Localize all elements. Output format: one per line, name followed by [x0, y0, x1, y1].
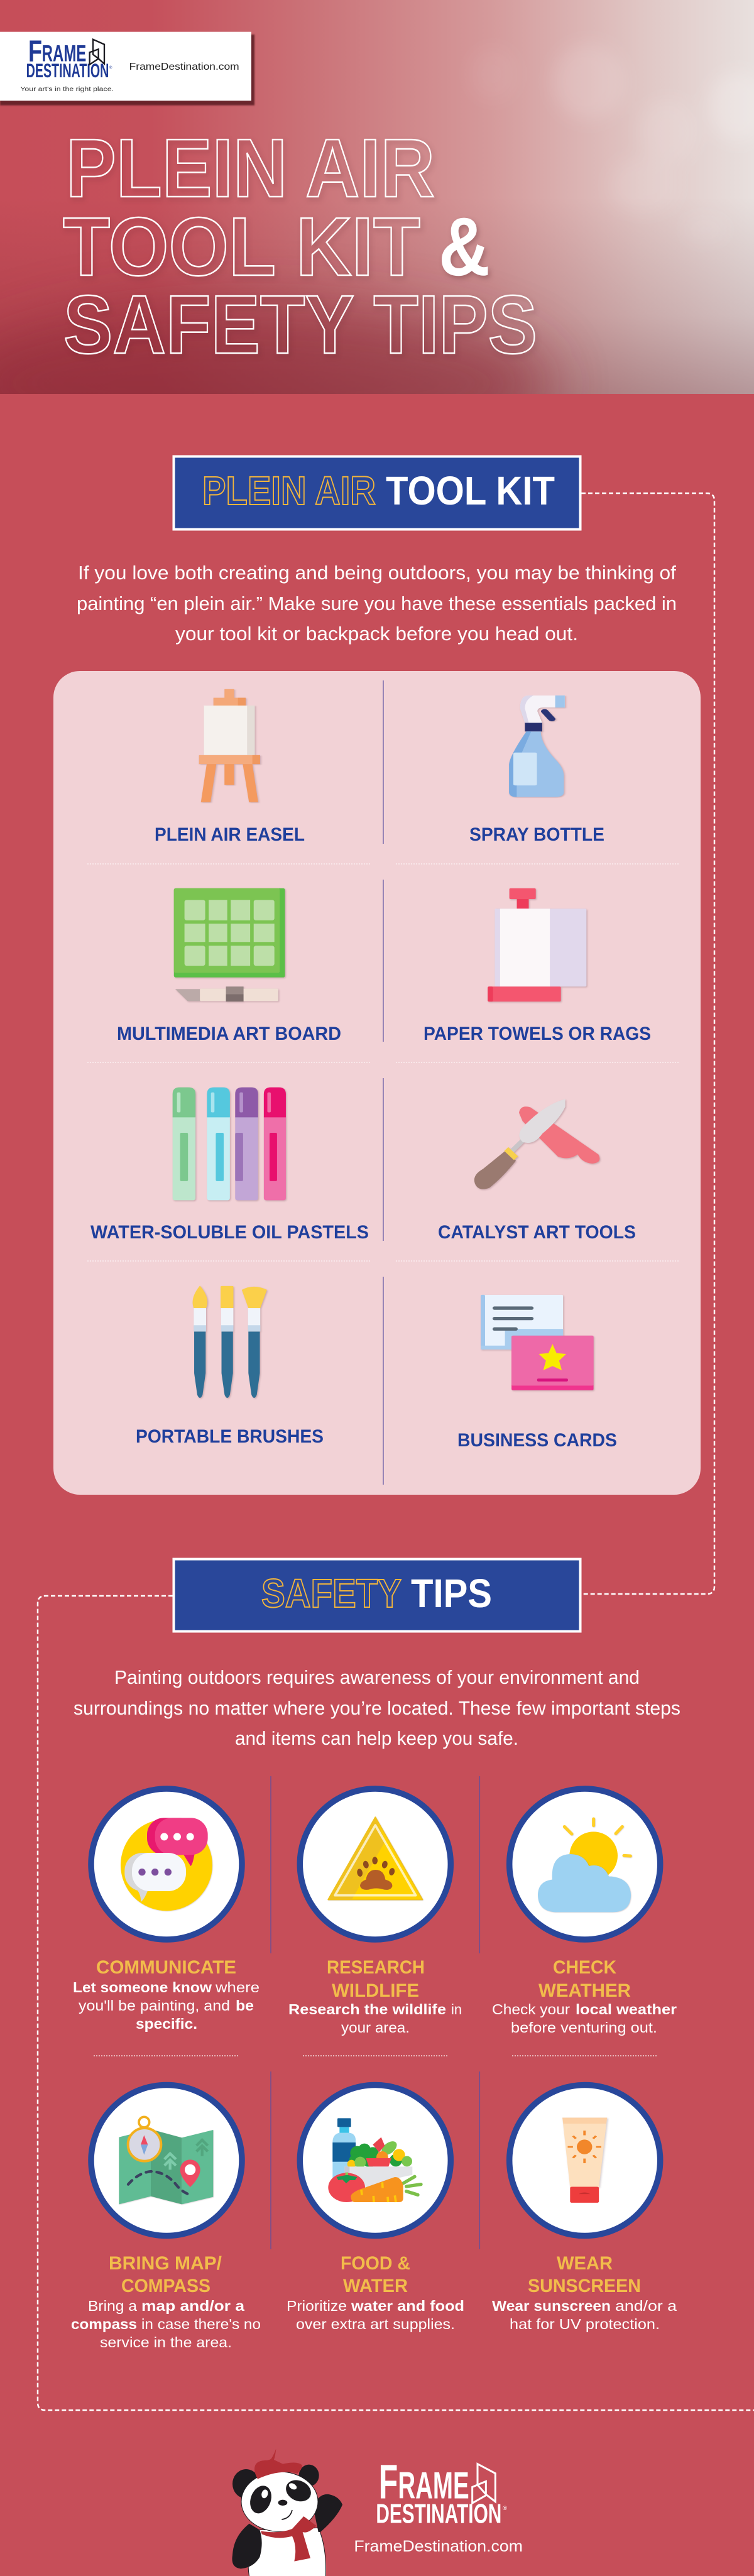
tip body: Prioritize — [287, 2298, 347, 2314]
icon: oil pastels — [173, 1088, 286, 1200]
top logo card — [0, 32, 254, 106]
heading: plein air tool kit — [173, 456, 581, 529]
card — [0, 32, 251, 101]
badge circle — [510, 2085, 660, 2235]
tip title — [109, 2253, 222, 2296]
logo wordmark: ® — [503, 2505, 507, 2511]
dashed connector: safety tips to footer — [38, 1596, 754, 2410]
hero bottom shade — [0, 0, 754, 394]
logo wordmark — [376, 2455, 507, 2529]
tip: research wildlife — [288, 1789, 462, 2036]
tip body: your area. — [341, 2019, 410, 2036]
logo wordmark: DESTINATION — [376, 2499, 501, 2529]
website: FrameDestination.com — [129, 62, 239, 72]
panel: tool kit — [53, 671, 701, 1495]
label: spray bottle: SPRAY BOTTLE — [469, 824, 604, 845]
safety tips intro text — [74, 1667, 680, 1749]
badge circle — [300, 1789, 451, 1940]
title — [63, 122, 537, 371]
tip title: COMMUNICATE — [96, 1957, 236, 1978]
tip title — [341, 2253, 410, 2296]
badge circle — [91, 2085, 242, 2235]
label: catalyst art tools: CATALYST ART TOOLS — [438, 1222, 636, 1243]
heading: safety tips: TIPS — [411, 1571, 492, 1616]
tip body: local weather — [576, 2001, 677, 2017]
logo wordmark: F — [379, 2455, 398, 2509]
logo window icon — [90, 40, 104, 65]
icon: paw warning sign — [328, 1817, 422, 1899]
label: portable brushes: PORTABLE BRUSHES — [136, 1426, 324, 1447]
tip title — [528, 2253, 641, 2296]
label: water-soluble oil pastels: WATER-SOLUBLE OIL PASTELS — [90, 1222, 369, 1243]
tip title — [327, 1957, 425, 2001]
logo wordmark: ® — [109, 65, 112, 70]
heading: plein air tool kit: TOOL KIT — [386, 468, 555, 513]
icon: map and compass — [119, 2117, 213, 2204]
title: TOOL KIT — [63, 200, 420, 293]
logo wordmark — [26, 34, 112, 82]
tip body — [73, 1979, 260, 2032]
tip title: WEATHER — [538, 1980, 631, 2001]
tip: food and water — [287, 2085, 464, 2332]
tool kit intro text: If you love both creating and being outdoors, you may be thinking of — [78, 562, 677, 584]
badge circle — [300, 2085, 451, 2235]
tip body — [288, 2001, 462, 2036]
tip body: in case there's no — [141, 2316, 261, 2332]
website: FrameDestination.com — [354, 2538, 523, 2555]
tip title: COMPASS — [121, 2276, 210, 2296]
tip body: map and/or a — [141, 2298, 244, 2314]
tip body: Wear sunscreen — [492, 2298, 611, 2314]
tool kit intro text: your tool kit or backpack before you head out. — [175, 623, 578, 645]
icon: water bottle and food — [328, 2118, 421, 2202]
tip body: service in the area. — [100, 2334, 232, 2350]
safety tips intro text: surroundings no matter where you’re located. These few important steps — [74, 1698, 680, 1719]
heading: safety tips — [173, 1559, 581, 1631]
hero banner — [0, 0, 754, 394]
badge circle — [91, 1789, 242, 1940]
icon: easel — [199, 689, 260, 802]
title: PLEIN AIR — [66, 122, 435, 214]
hero gradient background — [0, 0, 754, 394]
title: SAFETY TIPS — [63, 278, 537, 371]
tip body: compass — [71, 2316, 137, 2332]
tip body: before venturing out. — [511, 2019, 657, 2036]
tip: check weather — [492, 1789, 677, 2036]
tip body — [492, 2298, 677, 2332]
tip title: SUNSCREEN — [528, 2276, 641, 2296]
tip body: where — [215, 1979, 260, 1995]
tip body: specific. — [136, 2016, 197, 2032]
tip body: in — [451, 2001, 462, 2017]
raised arm — [313, 2494, 342, 2532]
tip body: and/or a — [615, 2298, 677, 2314]
left arm — [232, 2524, 262, 2568]
panel background — [53, 671, 701, 1495]
icon: catalyst art tools — [474, 1099, 599, 1189]
tip body: be — [236, 1997, 254, 2014]
face — [246, 2476, 314, 2519]
card shadow — [0, 35, 254, 106]
badge circle — [510, 1789, 660, 1940]
label: plein air easel: PLEIN AIR EASEL — [155, 824, 305, 845]
tip title — [538, 1957, 631, 2001]
icon: chat bubbles — [121, 1818, 212, 1911]
logo wordmark: DESTINATION — [26, 60, 109, 82]
panda mascot — [232, 2448, 342, 2576]
label: business cards: BUSINESS CARDS — [457, 1430, 617, 1451]
logo wordmark: RAME — [398, 2465, 469, 2507]
tip body: water and food — [351, 2298, 464, 2314]
tip title: BRING MAP/ — [109, 2253, 222, 2274]
logo wordmark: F — [28, 34, 42, 68]
icon: spray bottle — [509, 696, 565, 797]
tip title: RESEARCH — [327, 1957, 425, 1978]
footer logo — [354, 2455, 523, 2555]
tip: communicate — [73, 1789, 260, 2032]
safety tips intro text: Painting outdoors requires awareness of your environment and — [114, 1667, 640, 1688]
tip: bring map and compass — [71, 2085, 261, 2350]
tip title: WATER — [343, 2276, 408, 2296]
icon: portable brushes — [193, 1285, 267, 1398]
bokeh light spots — [469, 44, 754, 243]
label: paper towels or rags: PAPER TOWELS OR RAGS — [423, 1023, 651, 1044]
icon: sunscreen tube — [562, 2118, 607, 2203]
tip body: Let someone know — [73, 1979, 212, 1995]
icon: paper towels — [488, 888, 586, 1001]
heading: safety tips: SAFETY — [261, 1571, 402, 1616]
head — [241, 2472, 318, 2531]
scarf — [261, 2516, 316, 2562]
icon: sun and cloud — [538, 1819, 631, 1912]
icon: multimedia art board — [174, 888, 285, 1001]
dashed connector: tool kit to safety tips — [581, 493, 714, 1594]
tip body: hat for UV protection. — [510, 2316, 660, 2332]
title: & — [439, 200, 490, 293]
tip body — [71, 2298, 261, 2350]
label: multimedia art board: MULTIMEDIA ART BOARD — [117, 1023, 341, 1044]
ears — [232, 2465, 319, 2499]
tip body — [492, 2001, 677, 2036]
tool kit intro text: painting “en plein air.” Make sure you have these essentials packed in — [77, 593, 677, 614]
icon: business cards — [481, 1295, 594, 1390]
tip title: WEAR — [557, 2253, 613, 2274]
safety tips intro text: and items can help keep you safe. — [235, 1728, 518, 1749]
beret — [254, 2448, 302, 2479]
tip body: over extra art supplies. — [296, 2316, 455, 2332]
panda body — [248, 2528, 326, 2576]
tip: wear sunscreen — [492, 2085, 677, 2332]
logo wordmark: RAME — [42, 40, 86, 66]
tip body: Bring a — [88, 2298, 137, 2314]
logo window icon — [473, 2464, 495, 2503]
tip body: you'll be painting, and — [79, 1997, 230, 2014]
tip body: Check your — [492, 2001, 570, 2017]
tip body: Research the wildlife — [288, 2001, 446, 2017]
tip title: CHECK — [553, 1957, 616, 1978]
tip title: WILDLIFE — [332, 1980, 419, 2001]
tip title: FOOD & — [341, 2253, 410, 2274]
tagline: Your art's in the right place. — [20, 86, 114, 93]
heading: plein air tool kit: PLEIN AIR — [202, 468, 376, 513]
tool kit intro text — [77, 562, 677, 645]
tip body — [287, 2298, 464, 2332]
hero saturated lower-left shade — [0, 281, 568, 394]
